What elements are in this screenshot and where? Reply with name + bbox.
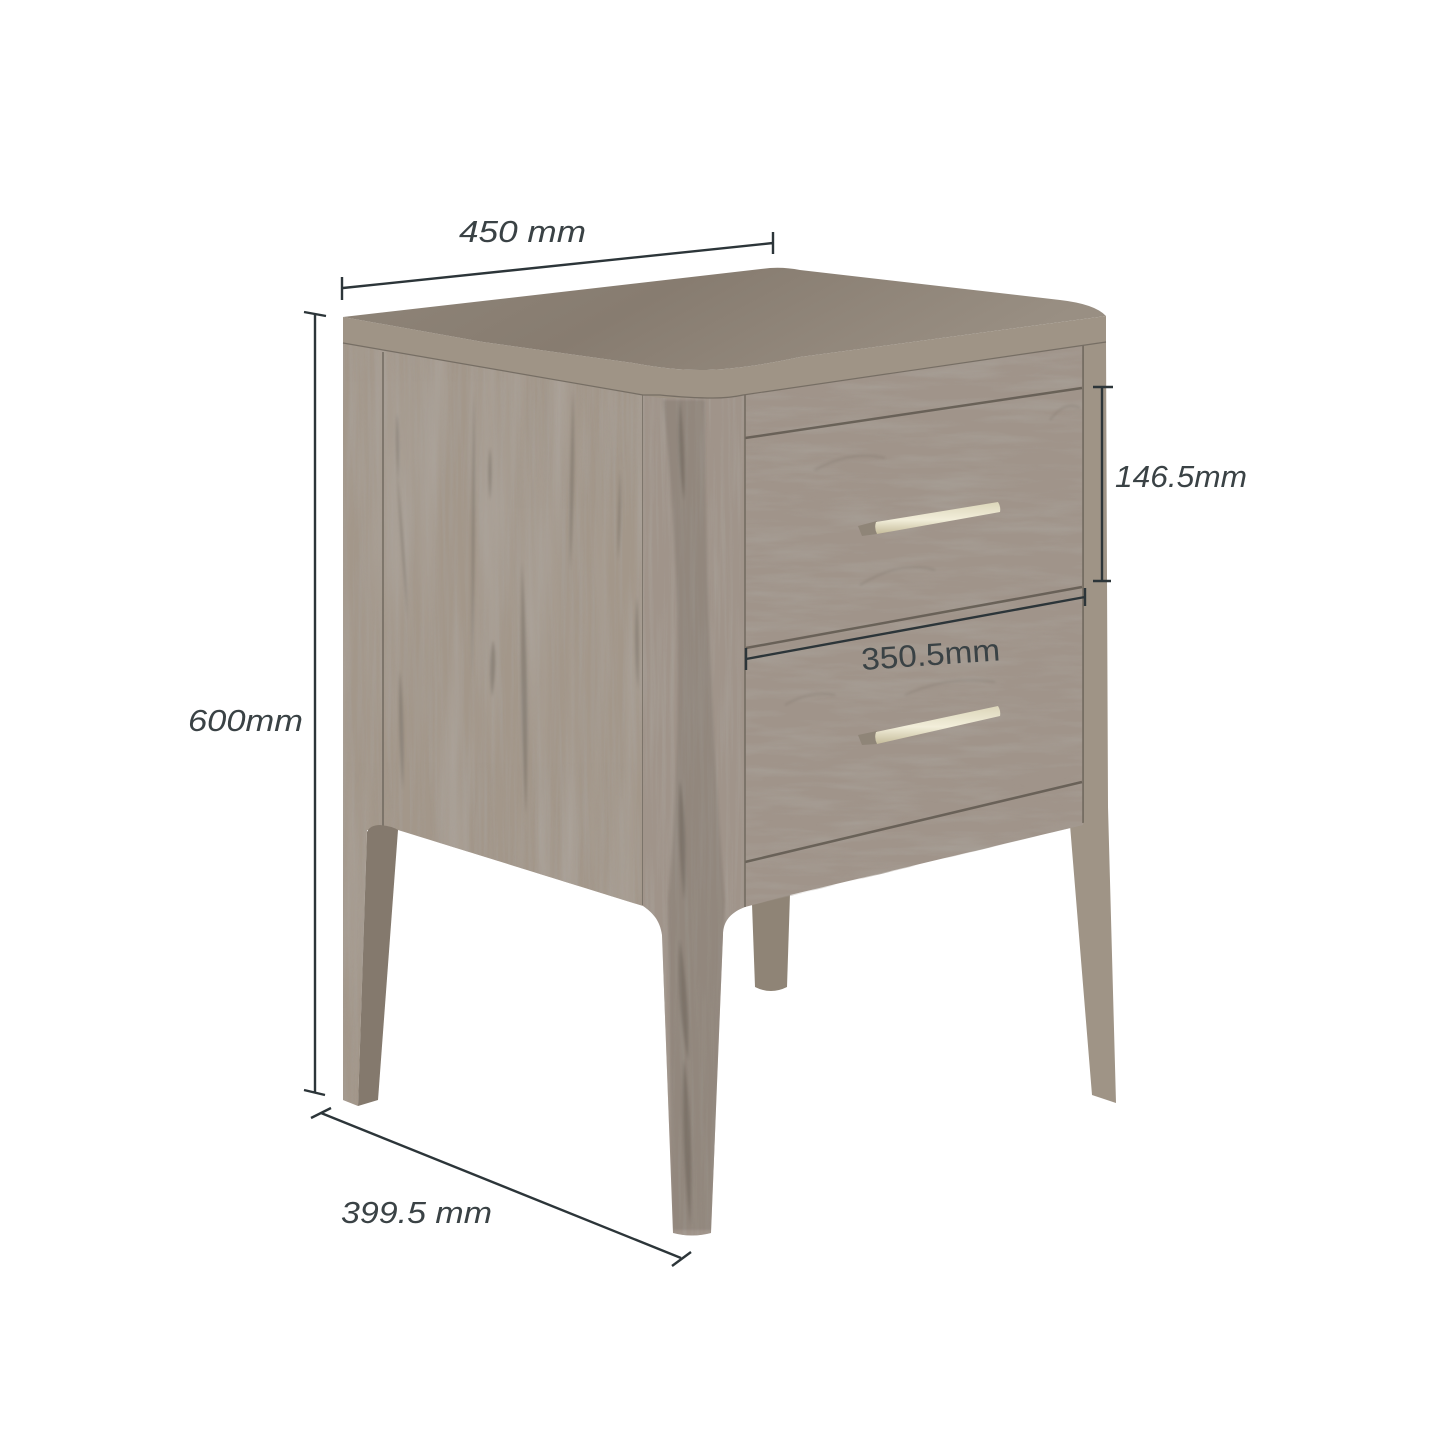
bottom drawer handle [858, 706, 1000, 745]
dimension: depth 399.5 mm [311, 1108, 691, 1266]
wood figure [785, 406, 1080, 705]
dimension: width 450 mm: 450 mm [459, 214, 586, 249]
dimension: height 600mm [188, 312, 326, 1095]
nightstand [340, 268, 1116, 1240]
left leg inner face [358, 825, 398, 1106]
dimension: height 600mm: 600mm [188, 703, 303, 738]
right leg [1070, 342, 1116, 1103]
front frame and drawers [745, 340, 1085, 910]
dimension: drawer width 350.5mm [746, 588, 1085, 677]
table top edge band [343, 316, 1106, 398]
dimension: width 450 mm [342, 214, 773, 300]
grain streaks [396, 390, 639, 815]
dimension: drawer width 350.5mm: 350.5mm [860, 632, 1001, 677]
dimension: depth 399.5 mm: 399.5 mm [341, 1195, 492, 1230]
dimension: drawer height 146.5mm: 146.5mm [1115, 459, 1247, 494]
side panel with outer leg face [340, 340, 650, 1110]
drawer lines [745, 388, 1082, 862]
top drawer handle [858, 502, 1000, 536]
front corner post and leg [640, 390, 750, 1240]
table top surface [343, 268, 1106, 370]
back leg [752, 894, 790, 991]
dimension: drawer height 146.5mm [1093, 387, 1247, 581]
